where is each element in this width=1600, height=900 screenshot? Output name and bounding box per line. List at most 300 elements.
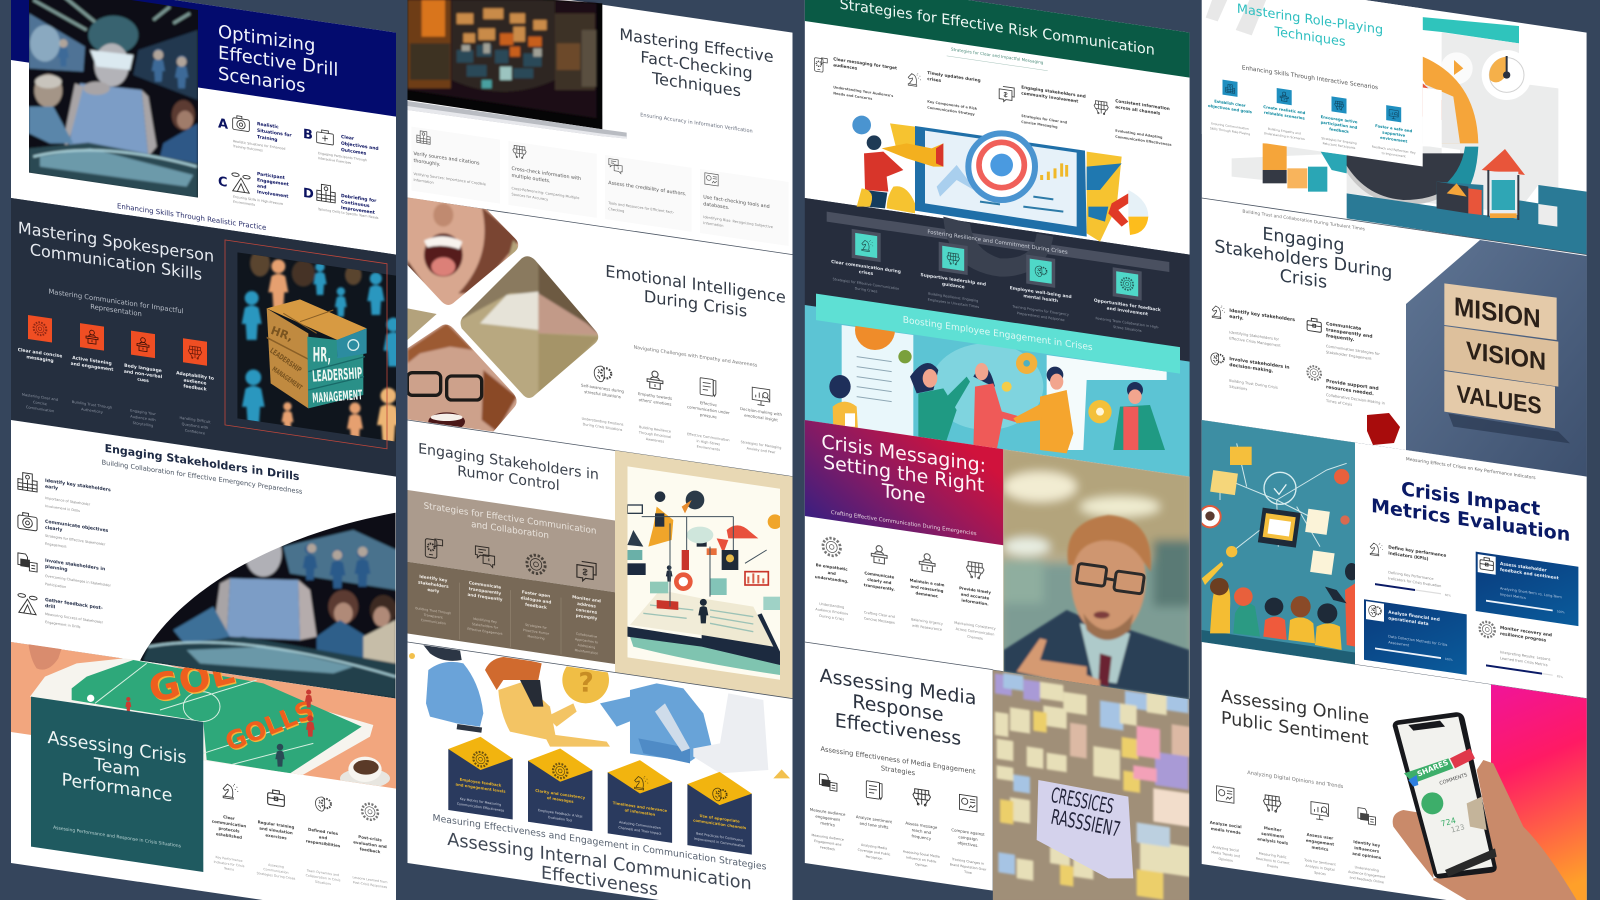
descriptions: to Improvement xyxy=(1382,151,1407,159)
labels: sentiment xyxy=(1261,831,1284,839)
strategy descriptions: Evaluating and Adapting xyxy=(1115,129,1163,140)
wooden blocks: VISION xyxy=(1466,338,1546,376)
labels: engagement xyxy=(1306,838,1334,847)
KPI card 2: feedback and sentiment xyxy=(1500,567,1559,581)
subtitle: Assessing Effectiveness of Media Engagement xyxy=(820,745,976,776)
photo: tablet with soccer pitch: GOL xyxy=(144,648,238,711)
list item 4: Provide support and xyxy=(1326,378,1379,392)
descriptions: Questions with xyxy=(182,422,208,430)
labels: messaging xyxy=(26,354,54,364)
descriptions: Fostering Team Collaboration in High- xyxy=(1095,316,1160,330)
title: Crisis xyxy=(1280,266,1327,293)
strategy labels: audiences xyxy=(833,62,858,71)
descriptions: and Feedback Online xyxy=(1349,875,1384,884)
subtitle: Navigating Challenges with Empathy and Awareness xyxy=(634,345,758,369)
descriptions: Spaces xyxy=(1314,871,1326,876)
item C xyxy=(218,172,289,206)
slide: Crisis Messaging: Setting the Right Tone xyxy=(805,420,1193,703)
illustration: colleagues discussing xyxy=(409,645,790,778)
item B xyxy=(304,128,378,164)
labels: influencers xyxy=(1354,845,1380,854)
photo: tablet with soccer pitch: GOLLS xyxy=(222,696,319,758)
title: Assessing Online xyxy=(1221,687,1369,728)
strategy descriptions: Needs and Concerns xyxy=(833,91,872,101)
labels: Clear communication during xyxy=(831,259,901,275)
item C: Ensuring Skills in High-Pressure xyxy=(233,195,283,206)
labels: Analyze social xyxy=(1210,820,1242,829)
labels: Identify key xyxy=(1353,839,1380,848)
list item 4: resources needed. xyxy=(1326,384,1374,397)
list item 3: Situations xyxy=(1229,385,1247,391)
descriptions xyxy=(22,393,211,436)
subtitle: Representation xyxy=(90,303,142,318)
item A: A xyxy=(218,116,229,133)
list item 2: transparently and xyxy=(1326,327,1373,340)
strategies panel xyxy=(408,490,615,664)
descriptions: Analyzing Media xyxy=(861,843,887,851)
descriptions: During a Crisis xyxy=(819,614,844,622)
labels: others' emotions xyxy=(639,397,671,407)
list item 2: Communicate objectives xyxy=(45,519,109,534)
strategy descriptions: Strategies for Clear and xyxy=(1021,114,1068,125)
card descriptions: Cross-Referencing: Comparing Multiple xyxy=(512,186,579,200)
title: Performance xyxy=(62,770,172,806)
panel labels: dialogue and xyxy=(521,595,551,605)
labels: Communicate xyxy=(864,570,895,580)
list item 3: Building Trust During Crisis xyxy=(1229,379,1278,390)
labels: Adaptability to xyxy=(176,370,214,382)
labels: pressure xyxy=(700,412,717,420)
list item 3: Involve stakeholders in xyxy=(45,558,105,573)
list item 2 xyxy=(17,512,108,548)
labels: analysis tools xyxy=(1257,836,1289,846)
labels: and xyxy=(828,570,836,576)
labels: Post-crisis xyxy=(358,834,382,843)
faint backdrop arc xyxy=(943,217,1053,277)
descriptions: Media Trends and xyxy=(1211,850,1240,858)
descriptions: Time xyxy=(963,870,972,875)
strategy labels: across all channels xyxy=(1115,104,1161,116)
labels: participation and xyxy=(1321,119,1358,130)
item D: Continuous xyxy=(341,199,370,209)
descriptions: Assessing xyxy=(268,863,284,869)
KPI card 3: 100% xyxy=(1445,657,1453,662)
title: Mastering Spokesperson xyxy=(18,218,214,266)
labels: communication under xyxy=(687,404,730,415)
metric cards: Channels and Their Impact xyxy=(618,826,662,836)
photo: HR leadership cube: MANAGEMENT xyxy=(312,388,363,407)
labels: Foster a safe and xyxy=(1375,123,1413,133)
slide: Boosting Employee Engagement in Crises xyxy=(816,294,1180,453)
item B: B xyxy=(303,127,313,143)
list item 1: Identify key stakeholders xyxy=(1229,308,1295,323)
strategy labels xyxy=(833,56,1170,117)
title: Assessing Media xyxy=(820,664,976,710)
title: Setting the Right xyxy=(823,450,985,497)
photo backdrop xyxy=(1003,449,1189,699)
descriptions: Effective Communication xyxy=(687,432,730,442)
KPI card 1 xyxy=(1370,542,1451,598)
list item 1: Identify key stakeholders xyxy=(45,478,111,493)
wooden blocks: MISION xyxy=(1454,291,1541,334)
item C: and xyxy=(257,183,266,191)
item C: Environments xyxy=(233,200,255,207)
descriptions: Across Communication xyxy=(956,627,994,637)
descriptions: Concise Messages xyxy=(864,616,895,625)
strategy descriptions: Communication Strategy xyxy=(927,106,975,117)
photo: wall of sticky notes xyxy=(993,667,1193,900)
labels: established xyxy=(216,831,242,840)
descriptions: Opinions xyxy=(1219,857,1233,863)
title: Emotional Intelligence xyxy=(605,262,786,307)
labels: Supportive leadership and xyxy=(921,272,986,288)
panel labels xyxy=(418,572,601,621)
illustration: network above team xyxy=(1199,443,1358,650)
metric cards: and engagement levels xyxy=(456,782,506,794)
labels: feedback xyxy=(360,846,381,854)
labels: Clear and concise xyxy=(18,347,62,360)
labels: Analyze sentiment xyxy=(856,814,893,824)
descriptions: Measuring Public xyxy=(1259,851,1287,860)
labels: Create realistic and xyxy=(1263,104,1306,115)
metric cards: Best Practices for Continuous xyxy=(696,831,743,842)
subtitle: Enhancing Skills Through Interactive Scenarios xyxy=(1242,65,1378,91)
descriptions: Brand Reputation Over xyxy=(950,862,987,872)
photo collage: diamonds xyxy=(407,197,603,433)
KPI card 3: Analyze financial and xyxy=(1388,609,1440,623)
labels: and non-verbal xyxy=(124,369,163,380)
card labels: Verify sources and citations xyxy=(414,151,480,167)
photo: woman with headset at holographic table xyxy=(27,0,200,200)
labels: Encourage active xyxy=(1321,114,1358,124)
wooden blocks xyxy=(1444,283,1570,443)
slide: Assessing Internal Communication Effectiveness xyxy=(408,642,792,900)
card labels: Assess the credibility of authors. xyxy=(608,180,687,198)
descriptions: Building Resilience: Engaging xyxy=(928,292,978,303)
KPI card 2: 100% xyxy=(1557,609,1565,614)
photo: hand holding phone: 724 xyxy=(1440,816,1457,829)
item C: Engagement xyxy=(257,177,290,188)
panel labels: concerns xyxy=(576,607,598,615)
item D xyxy=(303,182,379,220)
labels xyxy=(212,815,386,854)
panel labels: transparently xyxy=(469,586,501,596)
descriptions: Feedback xyxy=(820,845,835,852)
photo: HR leadership cube: HR, xyxy=(313,344,331,367)
item B: Interactive Exercises xyxy=(318,156,351,165)
labels: and xyxy=(319,834,327,840)
descriptions: in High-Stress xyxy=(697,439,720,446)
title: Tone xyxy=(881,479,926,508)
list item 4 xyxy=(18,593,103,628)
KPI card 1: Define key performance xyxy=(1388,544,1446,559)
title panel xyxy=(31,697,203,872)
labels: Monitor xyxy=(1264,825,1281,833)
descriptions xyxy=(815,600,996,644)
labels: Clear xyxy=(223,814,235,821)
labels: Active listening xyxy=(72,355,112,367)
title: Effectiveness xyxy=(541,863,658,900)
card descriptions: Sources for Accuracy xyxy=(512,192,548,202)
title: Communication Skills xyxy=(30,240,202,284)
list item 2: Communication Strategies for xyxy=(1326,344,1380,356)
item C: Participant xyxy=(257,171,286,181)
panel descriptions xyxy=(415,606,598,656)
descriptions: Communication xyxy=(26,405,54,413)
labels: exercises xyxy=(265,832,287,841)
slide: Mastering Role-Playing Techniques xyxy=(1202,0,1587,255)
descriptions: Opinion xyxy=(915,862,927,868)
descriptions: Through Emotional xyxy=(638,430,671,439)
card descriptions: Tools and Resources for Efficient Fact- xyxy=(607,201,675,215)
item B: Engaging Participants Through xyxy=(318,151,367,162)
panel labels: stakeholders xyxy=(418,580,449,589)
card labels xyxy=(414,151,770,217)
panel labels: feedback xyxy=(525,602,547,610)
strategy labels: crises xyxy=(927,76,942,83)
card descriptions: Identifying Bias: Recognizing Subjective xyxy=(703,215,773,229)
card labels: thoroughly. xyxy=(413,158,441,168)
descriptions: Coverage and Public xyxy=(858,848,891,857)
labels: frequency xyxy=(912,833,932,841)
slide: Mastering Effective Fact-Checking Techniques xyxy=(407,0,792,255)
descriptions: Situations xyxy=(315,880,331,886)
KPI card 1: Indicators for Crisis Evaluation xyxy=(1388,576,1441,588)
slide: Optimizing Effective Drill Scenarios xyxy=(11,0,396,255)
strategy descriptions xyxy=(833,85,1172,147)
list item 2: frequently. xyxy=(1326,333,1355,343)
header gradient xyxy=(805,420,1003,545)
strategy labels: Timely updates during xyxy=(927,70,981,83)
descriptions xyxy=(812,833,987,877)
icons row xyxy=(223,782,378,821)
descriptions: Audience Emotions xyxy=(815,607,848,616)
descriptions: Ensuring Communication xyxy=(1211,121,1249,131)
photo: tablet with soccer pitch: GOLLS xyxy=(221,694,318,757)
descriptions: Stress Situations xyxy=(1113,325,1142,333)
illustration frame xyxy=(615,451,792,699)
slide: Emotional Intelligence During Crisis xyxy=(407,197,792,477)
subtitle: Building Collaboration for Effective Emergency Preparedness xyxy=(102,458,303,496)
item B: Outcomes xyxy=(341,147,367,157)
subtitle: Mastering Communication for Impactful xyxy=(48,288,184,315)
column 3 of slides xyxy=(805,0,1193,900)
labels: Measure audience xyxy=(810,807,846,817)
illustration: people shaking hands xyxy=(829,310,1167,453)
illustration: colleagues discussing: ? xyxy=(578,668,594,699)
descriptions: Team Dynamics and xyxy=(306,868,339,877)
labels: media trends xyxy=(1211,826,1241,835)
labels: feedback xyxy=(1329,126,1349,134)
panel icons xyxy=(425,538,596,583)
slide: Strategies for Effective Risk Communication xyxy=(805,0,1190,255)
metric cards: Analyzing Communication xyxy=(619,820,661,830)
descriptions: Reactions to Current xyxy=(1256,856,1290,866)
labels: Be empathetic xyxy=(816,562,848,572)
labels: audience xyxy=(184,377,206,387)
item B: Clear xyxy=(341,134,355,142)
slide: Engaging Stakeholders in Drills xyxy=(11,420,400,703)
descriptions: During Crisis Situations xyxy=(583,422,623,432)
list item 3 xyxy=(17,552,111,588)
metric cards: Evaluation Tool xyxy=(548,815,572,823)
labels: crises xyxy=(859,269,874,277)
KPI card 2: Impact Metrics xyxy=(1500,592,1526,600)
KPI card 4: resilience progress xyxy=(1500,631,1547,644)
descriptions: Teams xyxy=(223,866,234,872)
descriptions: Collaboration in Crisis xyxy=(306,873,341,882)
slide: Engaging Stakeholders During Crisis xyxy=(1202,198,1587,477)
list item 3: Participation xyxy=(45,582,66,589)
slide: Mastering Spokesperson Communication Skills xyxy=(11,198,403,477)
labels: Self-awareness during xyxy=(581,383,625,394)
list item 2: Strategies for Effective Stakeholder xyxy=(45,534,106,547)
KPI card 1: Defining Key Performance xyxy=(1388,570,1433,581)
card icons xyxy=(417,130,718,188)
labels: and reassuring xyxy=(911,584,944,593)
labels: feedback xyxy=(183,383,208,393)
descriptions: Strategies for Effective Communication xyxy=(833,277,899,291)
red hexagon xyxy=(1367,413,1400,445)
subtitle: Crafting Effective Communication During Emergencies xyxy=(831,510,977,537)
descriptions: Skills Through Role-Playing xyxy=(1210,126,1250,136)
descriptions: Feedback and Reflection: Key xyxy=(1372,145,1416,155)
KPI card 3: operational data xyxy=(1388,615,1429,627)
labels: objectives. xyxy=(957,840,979,848)
descriptions: Preparedness and Response xyxy=(1017,311,1065,322)
metric cards xyxy=(448,732,752,855)
icons xyxy=(1216,786,1375,828)
labels: and engagement xyxy=(71,361,114,373)
descriptions: Understanding xyxy=(1355,865,1379,873)
item A: Situations for xyxy=(257,128,292,139)
list item 2: Communicate xyxy=(1326,321,1361,332)
descriptions: Concise xyxy=(33,400,48,406)
labels: demeanor. xyxy=(915,590,939,599)
banner caption: Fostering Resilience and Commitment During Crises xyxy=(927,229,1068,256)
icons xyxy=(823,537,984,580)
labels: Regular training xyxy=(258,819,295,830)
descriptions: Audience with xyxy=(130,415,156,422)
KPI card 4: Monitor recovery and xyxy=(1500,625,1552,638)
item A: Training xyxy=(257,134,278,143)
card descriptions xyxy=(414,172,773,235)
descriptions: During Crises xyxy=(855,286,878,294)
subtitle: Analyzing Digital Opinions and Trends xyxy=(1247,770,1344,790)
labels: Establish clear xyxy=(1214,98,1246,108)
title: Crisis Messaging: xyxy=(821,430,986,477)
KPI card 2: Assess stakeholder xyxy=(1500,561,1548,574)
list item 1: Importance of Stakeholder xyxy=(45,496,91,507)
list item 4: Measuring Success of Stakeholder xyxy=(45,612,104,625)
descriptions xyxy=(214,856,388,888)
subtitle: Ensuring Accuracy in Information Verification xyxy=(640,112,753,135)
subtitle: Building Trust and Collaboration During Turbulent Times xyxy=(1242,209,1366,233)
strategy descriptions: Concise Messaging xyxy=(1021,120,1058,129)
panel descriptions: Collaborative xyxy=(576,632,597,639)
metric cards: Employee feedback xyxy=(460,777,502,788)
subtitle: Strategies for Clear and Impactful Messaging xyxy=(951,47,1044,65)
descriptions: Lessons Learned from xyxy=(353,875,387,884)
title: Fact-Checking xyxy=(640,47,753,83)
descriptions: Building Resilience xyxy=(639,425,671,434)
column 1 of slides xyxy=(11,0,403,900)
labels: metrics xyxy=(1312,844,1329,852)
labels: and accurate xyxy=(961,591,990,601)
strategy labels: community involvement xyxy=(1021,90,1078,104)
descriptions: Maintaining Consistency xyxy=(954,621,996,631)
descriptions: Strategies During Crises xyxy=(257,871,296,881)
descriptions xyxy=(1210,118,1416,160)
labels: information. xyxy=(961,598,989,607)
labels xyxy=(1208,96,1413,144)
metric cards: of information xyxy=(625,807,655,817)
descriptions: Tools for Sentiment xyxy=(1303,858,1337,867)
gradient side panel xyxy=(1491,685,1587,900)
photo: hand holding phone: COMMENTS xyxy=(1439,772,1468,787)
panel descriptions: Addressing xyxy=(578,643,595,650)
list item 1: Involvement in Drills xyxy=(45,504,80,513)
strategy labels: Engaging stakeholders and xyxy=(1021,84,1086,99)
labels: reach and xyxy=(912,827,932,835)
title: Engaging Stakeholders in Drills xyxy=(105,442,300,483)
labels: metrics xyxy=(820,820,835,827)
list item 1 xyxy=(17,472,110,512)
KPI card 2: Analyzing Short-Term vs. Long-Term xyxy=(1500,586,1562,600)
labels: protocols xyxy=(218,826,240,834)
descriptions: Handling Difficult xyxy=(179,416,211,424)
labels: Body language xyxy=(124,363,162,374)
icon tiles xyxy=(1222,80,1401,122)
descriptions: Authenticity xyxy=(81,407,104,415)
subtitle: Strategies xyxy=(881,764,916,777)
descriptions: Influence on Public xyxy=(906,855,937,864)
descriptions: Strategies for Engaging xyxy=(1321,136,1357,145)
descriptions: Mastering Clear and xyxy=(22,393,58,402)
title: Public Sentiment xyxy=(1221,708,1369,750)
labels: stressful situations xyxy=(584,389,621,399)
descriptions: Events xyxy=(1267,864,1279,869)
descriptions: Engaging Your xyxy=(130,409,156,416)
card descriptions: Information xyxy=(703,221,723,228)
KPI card 3 xyxy=(1364,599,1467,675)
photo: hand holding phone: 123 xyxy=(1450,822,1466,835)
labels xyxy=(810,806,985,850)
header band xyxy=(805,0,1190,78)
descriptions: Reluctant Participants xyxy=(1323,141,1356,150)
title: Effectiveness xyxy=(835,709,961,750)
labels xyxy=(18,347,214,394)
descriptions: Perception xyxy=(866,854,882,861)
panel labels: Monitor and xyxy=(572,594,601,603)
descriptions: Crafting Clear and xyxy=(864,610,895,619)
labels: Decision-making with xyxy=(740,406,782,417)
item C: Involvement xyxy=(257,189,289,200)
slide: Engaging Stakeholders in Rumor Control xyxy=(408,420,792,699)
panel descriptions: Misinformation xyxy=(575,648,598,656)
title: Team xyxy=(93,755,140,782)
list item 4: Collaborative Decision-Making in xyxy=(1326,393,1385,406)
illustration: megaphone, target and dashboard xyxy=(852,116,1148,242)
KPI card 2 xyxy=(1476,552,1578,626)
labels: responsibilities xyxy=(306,838,341,848)
labels: environment xyxy=(1380,135,1408,144)
title: Assessing Internal Communication xyxy=(447,830,752,895)
labels xyxy=(581,383,782,429)
labels: guidance xyxy=(942,281,965,290)
list item 1: early. xyxy=(1229,314,1244,322)
labels: Provide timely xyxy=(959,585,991,595)
